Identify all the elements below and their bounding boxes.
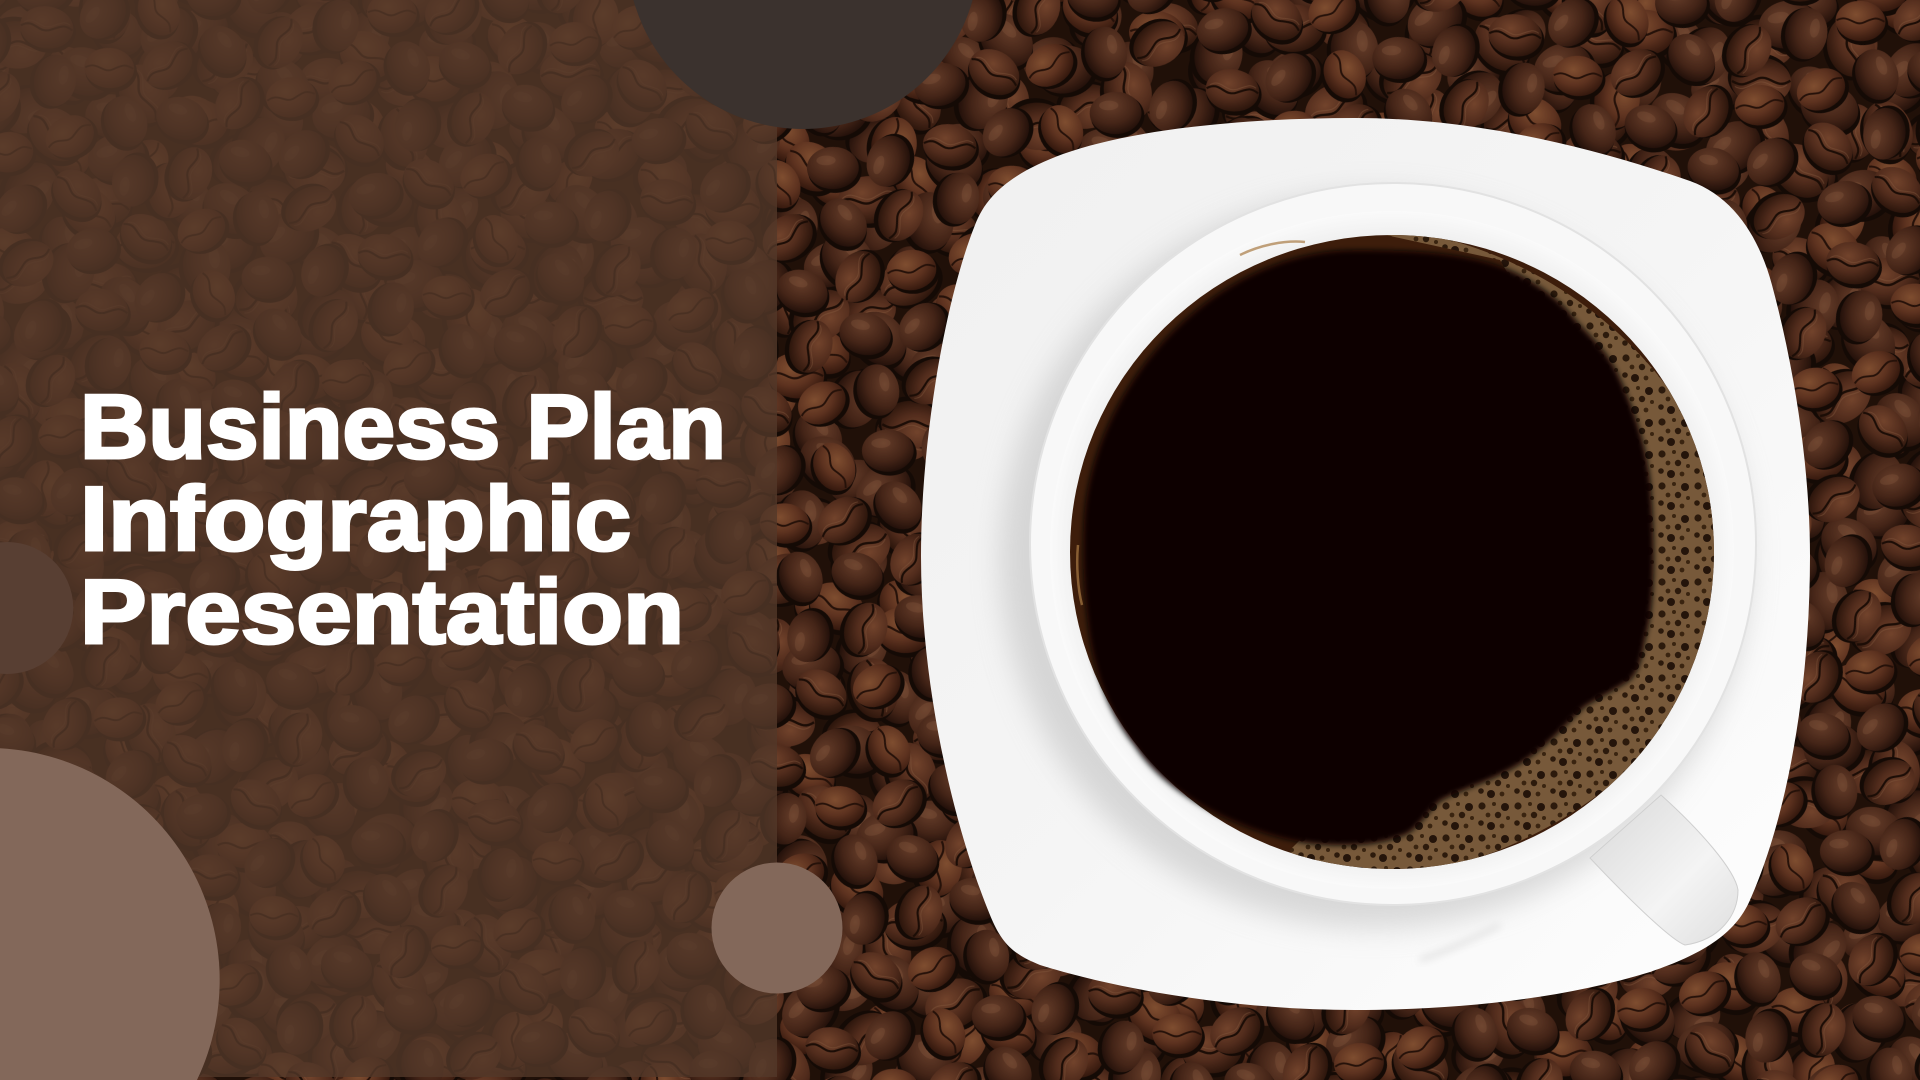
cup handle — [1590, 795, 1738, 945]
cup shadow — [1000, 192, 1750, 928]
title — [80, 377, 726, 663]
circle: dark top — [633, 0, 973, 129]
coffee liquid — [1070, 235, 1714, 869]
title line 2: Infographic — [80, 469, 631, 570]
cup rim — [1030, 183, 1756, 905]
saucer — [921, 118, 1810, 1010]
coffee cup and saucer — [921, 118, 1810, 1010]
title line 3: Presentation — [80, 562, 684, 663]
panel: translucent brown overlay — [0, 0, 777, 1077]
coffee surface — [1083, 250, 1654, 845]
circle: large bottom-left — [0, 748, 220, 1080]
foam crescent — [1290, 225, 1730, 885]
circle: medium left edge — [0, 542, 73, 674]
glints — [1077, 242, 1305, 605]
circle: small on panel edge — [712, 862, 842, 994]
title line 1: Business Plan — [80, 377, 726, 478]
cup inner wall — [1050, 211, 1734, 889]
